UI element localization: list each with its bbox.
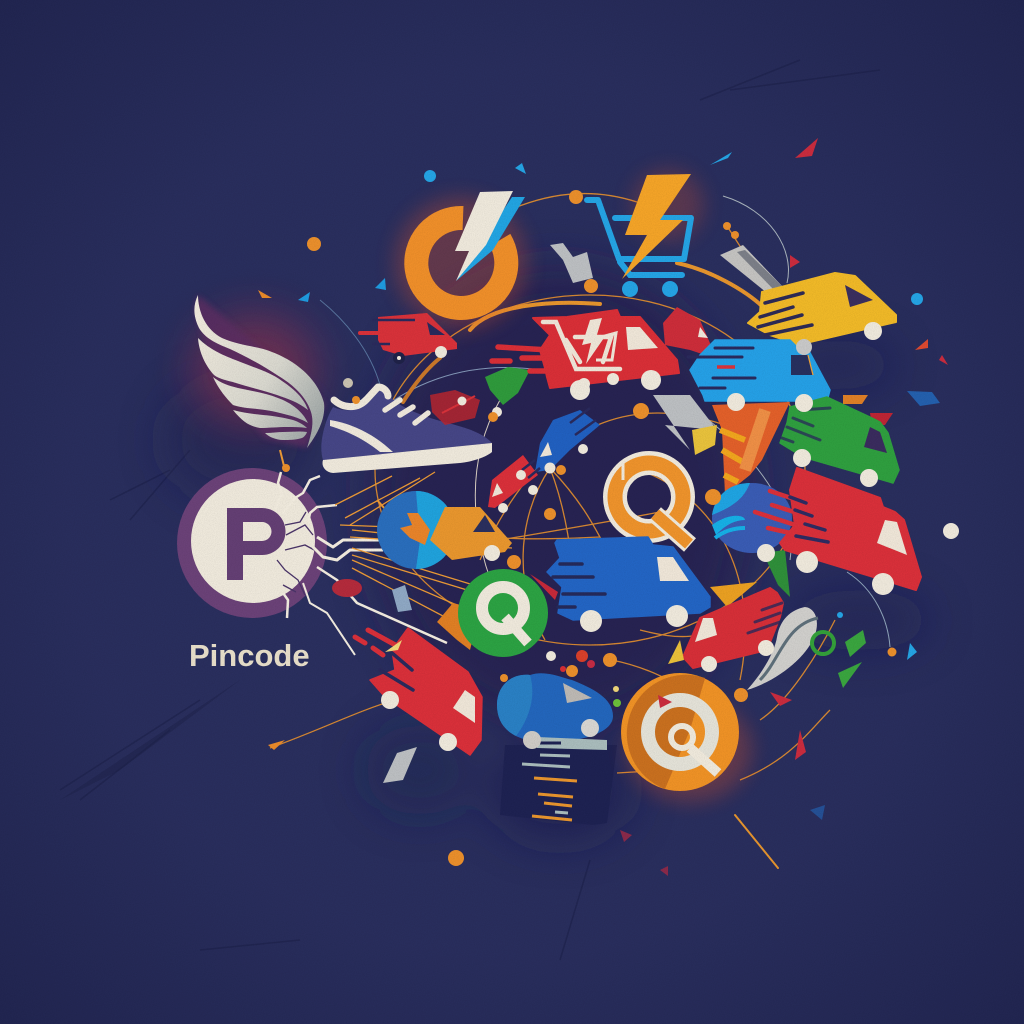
paper scrap: upper right bbox=[720, 245, 783, 293]
truck: large red right bbox=[755, 468, 921, 590]
shape: red splash bbox=[332, 579, 362, 597]
shape: orange arrow bbox=[530, 574, 757, 607]
icon: green Q bbox=[437, 569, 548, 657]
truck: blue upper right bbox=[688, 340, 830, 401]
wing bbox=[193, 295, 325, 448]
colored dots bbox=[282, 170, 923, 866]
panel: dark document with code lines bbox=[500, 737, 617, 825]
network arcs bbox=[270, 194, 890, 780]
thick orange swooshes bbox=[403, 263, 778, 868]
truck: small red center bbox=[488, 455, 540, 508]
logo: Pincode P circle bbox=[177, 468, 327, 618]
dark shadow behind cluster bbox=[165, 270, 930, 840]
icon: orange target Q bbox=[621, 673, 752, 802]
truck: large blue bbox=[547, 537, 710, 620]
cracks from logo bbox=[275, 472, 447, 655]
shape: green and red blot bbox=[430, 367, 530, 425]
icon: blue cloud bbox=[497, 673, 613, 742]
icon: orange power ring with lightning bolt bbox=[395, 191, 527, 329]
truck: red lower left bbox=[355, 628, 482, 755]
label: Pincode: Pincode bbox=[189, 638, 310, 673]
truck: yellow bbox=[748, 273, 896, 345]
confetti bbox=[258, 138, 948, 876]
shape: silver feather with green ring bbox=[747, 607, 834, 690]
truck: small red upper left bbox=[360, 313, 457, 364]
truck: red with cart bbox=[492, 310, 679, 388]
shape: blue swirl disc bbox=[712, 483, 792, 553]
truck: small orange center bbox=[430, 507, 512, 560]
icon: shopping cart with lightning bolt bbox=[587, 169, 704, 297]
shape: orange flame bbox=[712, 402, 790, 495]
icon: sneaker bbox=[321, 387, 492, 473]
icon: orange Q bbox=[615, 462, 690, 545]
shape: yellow scrap bbox=[692, 425, 717, 455]
truck: red lower right bbox=[683, 588, 783, 668]
truck: small red upper right bbox=[663, 307, 713, 356]
truck: green bbox=[780, 395, 899, 483]
white network nodes bbox=[343, 322, 959, 751]
shape: green leaf bbox=[763, 550, 790, 597]
radiating sparks bbox=[280, 450, 512, 625]
truck: small blue center bbox=[535, 408, 600, 472]
silver paper scraps bbox=[383, 243, 717, 783]
icon: blue disc with orange swirl bbox=[377, 491, 455, 569]
